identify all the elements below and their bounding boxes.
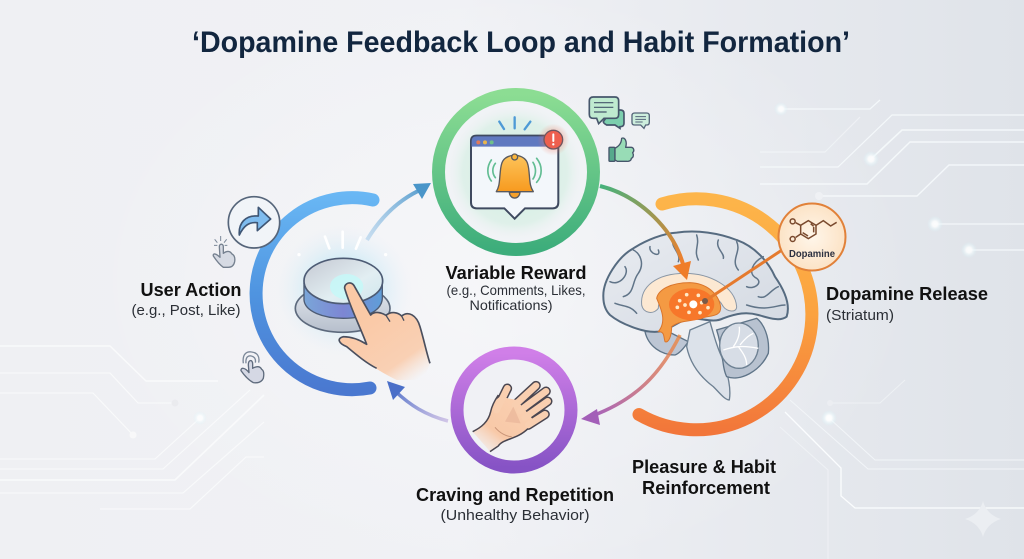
- sublabel: striatum: (Striatum): [826, 307, 894, 324]
- molecule: [790, 219, 837, 241]
- panel: craving and repetition: [416, 353, 614, 524]
- label: dopamine release: Dopamine Release: [826, 283, 988, 304]
- label: craving and repetition: Craving and Repetition: [416, 484, 614, 505]
- arrow: craving to action: [387, 381, 448, 421]
- icon: tap hand bottom: [241, 352, 264, 383]
- green ring: [438, 94, 594, 250]
- label: pleasure and habit reinforcement: [632, 456, 776, 498]
- circuit pattern: right bottom: [780, 380, 1024, 559]
- title: ‘Dopamine Feedback Loop and Habit Formation’: [192, 26, 850, 59]
- panel: variable reward: [438, 94, 649, 313]
- sparkle icon: [965, 501, 1001, 537]
- sublabel: notifications: Notifications): [470, 297, 552, 313]
- arrow: action to reward: [367, 183, 431, 240]
- icon: dopamine badge: [702, 204, 846, 304]
- label: dopamine: Dopamine: [789, 248, 835, 260]
- label: variable reward: Variable Reward: [446, 263, 586, 283]
- icon: open hand: [473, 386, 548, 452]
- circuit pattern: right top: [760, 100, 1024, 258]
- icon: tap hand top: [213, 236, 235, 267]
- sublabel: variable reward: (e.g., Comments, Likes,: [446, 282, 586, 298]
- icon: share arrow badge: [228, 197, 280, 248]
- connector line: [705, 250, 782, 301]
- panel: user action: [132, 197, 430, 390]
- arrow: reward to dopamine: [600, 186, 691, 280]
- panel: dopamine release: [603, 199, 988, 430]
- icon: brain: [603, 231, 788, 400]
- orange ring arc: [639, 199, 812, 430]
- label: pleasure and habit reinforcement: Reinforcement: [642, 477, 770, 498]
- sublabel: unhealthy behavior: (Unhealthy Behavior): [440, 507, 590, 524]
- blue ring arc: [256, 198, 373, 390]
- icon: push button with hand: [275, 225, 430, 380]
- label: pleasure and habit reinforcement: Pleasure & Habit: [632, 456, 776, 477]
- icon: chat bubbles and thumbs up: [589, 97, 649, 161]
- icon: notification window with bell: [471, 117, 569, 219]
- purple ring: [457, 353, 571, 467]
- sublabel: user action: (e.g., Post, Like): [132, 303, 240, 319]
- circuit pattern: left bottom: [0, 346, 264, 509]
- arrow: dopamine to craving: [581, 335, 680, 425]
- glow: [445, 102, 585, 242]
- label: user action: User Action: [140, 280, 242, 300]
